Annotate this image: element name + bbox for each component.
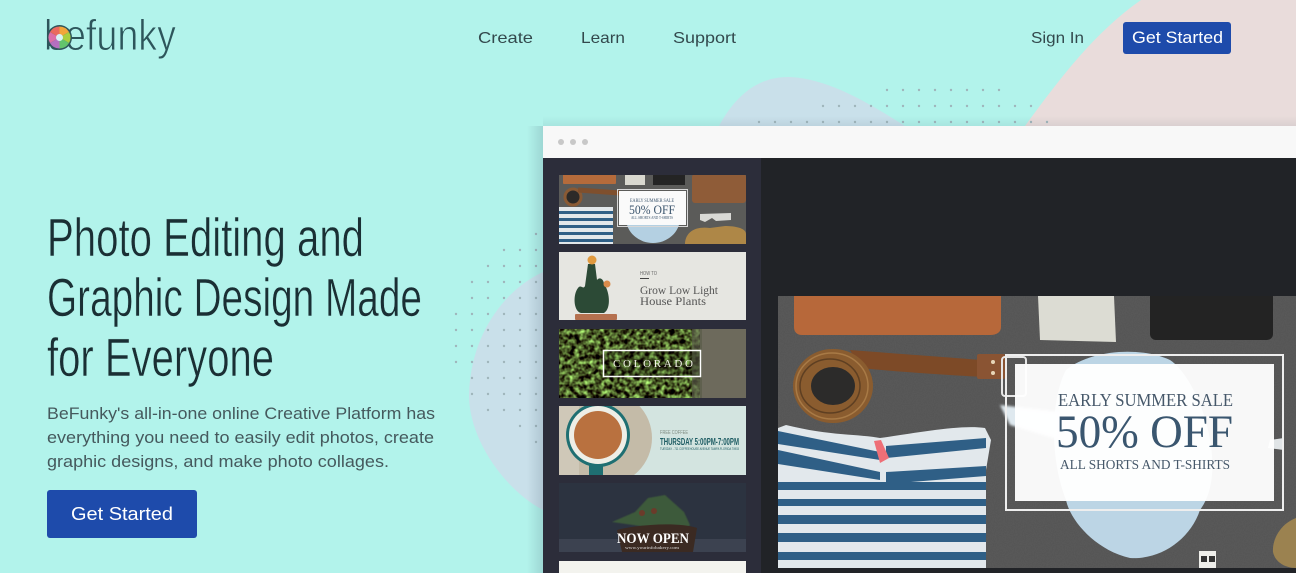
thumbnail: free coffee xyxy=(559,406,746,475)
sale card frame xyxy=(1006,355,1283,510)
thumbnail: free coffee: FREE COFFEE xyxy=(660,430,689,436)
dot pattern, top xyxy=(758,89,1048,123)
thumbnail: grow low light house plants xyxy=(559,252,746,320)
sale card: ALL SHORTS AND T-SHIRTS xyxy=(1060,457,1230,472)
nav: Sign In: Sign In xyxy=(1031,30,1084,47)
hero description xyxy=(47,405,435,471)
nav: Learn: Learn xyxy=(581,30,625,47)
thumbnail: now open xyxy=(559,494,746,552)
dot pattern, left xyxy=(455,233,537,443)
navigation links xyxy=(478,30,1084,47)
tag xyxy=(1199,551,1216,568)
felt background xyxy=(778,296,1296,568)
thumbnail: now open: www.yourinfobakery.com xyxy=(625,545,680,550)
boot xyxy=(1273,518,1296,568)
hero description: everything you need to easily edit photos, create xyxy=(47,429,434,447)
logo wordmark: befunky xyxy=(44,11,176,60)
app window shadow, top xyxy=(543,116,1296,126)
hero heading: for Everyone xyxy=(47,328,274,388)
header button: Get Started xyxy=(1123,22,1231,54)
hero heading xyxy=(47,208,422,388)
thumbnail: grow low light house plants: House Plants xyxy=(640,296,707,308)
decorative blue blob, top xyxy=(719,77,905,126)
thumbnail: summer sale xyxy=(559,174,746,244)
thumbnail: summer sale: EARLY SUMMER SALE xyxy=(630,199,674,204)
hero description: graphic designs, and make photo collages. xyxy=(47,453,389,471)
belt xyxy=(796,350,1005,419)
nav: Create: Create xyxy=(478,30,533,47)
sale card xyxy=(1015,364,1274,501)
thumbnail: grow low light house plants: Grow Low Light xyxy=(640,285,719,297)
logo colour wheel xyxy=(47,25,72,50)
thumbnail: now open: NOW OPEN xyxy=(617,531,689,547)
decorative pink corner shape xyxy=(1025,0,1296,126)
hero description: BeFunky's all-in-one online Creative Platform has xyxy=(47,405,435,423)
logo xyxy=(44,11,176,60)
hero heading: Photo Editing and xyxy=(47,208,364,268)
white cloth xyxy=(1038,296,1116,342)
sale card: EARLY SUMMER SALE xyxy=(1058,390,1233,410)
thumbnail: grow low light house plants: HOW TO xyxy=(640,271,657,277)
thumbnail: partial, cut off xyxy=(559,561,746,573)
app window xyxy=(543,126,1296,573)
thumbnail: summer sale: ALL SHORTS AND T-SHIRTS xyxy=(631,216,673,220)
striped shirt xyxy=(778,425,991,568)
hero heading: Graphic Design Made xyxy=(47,268,422,328)
hero button: Get Started xyxy=(47,490,197,538)
app window shadow, left xyxy=(527,126,543,573)
main canvas image xyxy=(778,290,1296,568)
editor canvas background xyxy=(761,158,1296,573)
decorative blue blob, left xyxy=(469,272,543,510)
window title bar xyxy=(543,126,1296,158)
thumbnail: free coffee: TUESDAY - 711 COFFEEHOUSE AVENUE TAMPA FLORIDA 70903 xyxy=(660,447,739,451)
hero button: Get Started: Get Started xyxy=(71,503,173,524)
tablet xyxy=(1150,296,1273,340)
thumbnail: Colorado: COLORADO xyxy=(613,358,693,370)
sidebar xyxy=(543,158,761,573)
leather wallet xyxy=(794,296,1001,335)
nav: Support: Support xyxy=(673,30,737,47)
buckle outline xyxy=(1002,357,1026,396)
blue scarf xyxy=(1066,352,1206,558)
thumbnail: summer sale: 50% OFF xyxy=(629,203,675,217)
thumbnail: Colorado xyxy=(559,329,746,398)
sale card: 50% OFF xyxy=(1056,406,1233,458)
header button: Get Started: Get Started xyxy=(1132,29,1223,47)
thumbnail: free coffee: THURSDAY 5:00PM-7:00PM xyxy=(660,436,739,448)
